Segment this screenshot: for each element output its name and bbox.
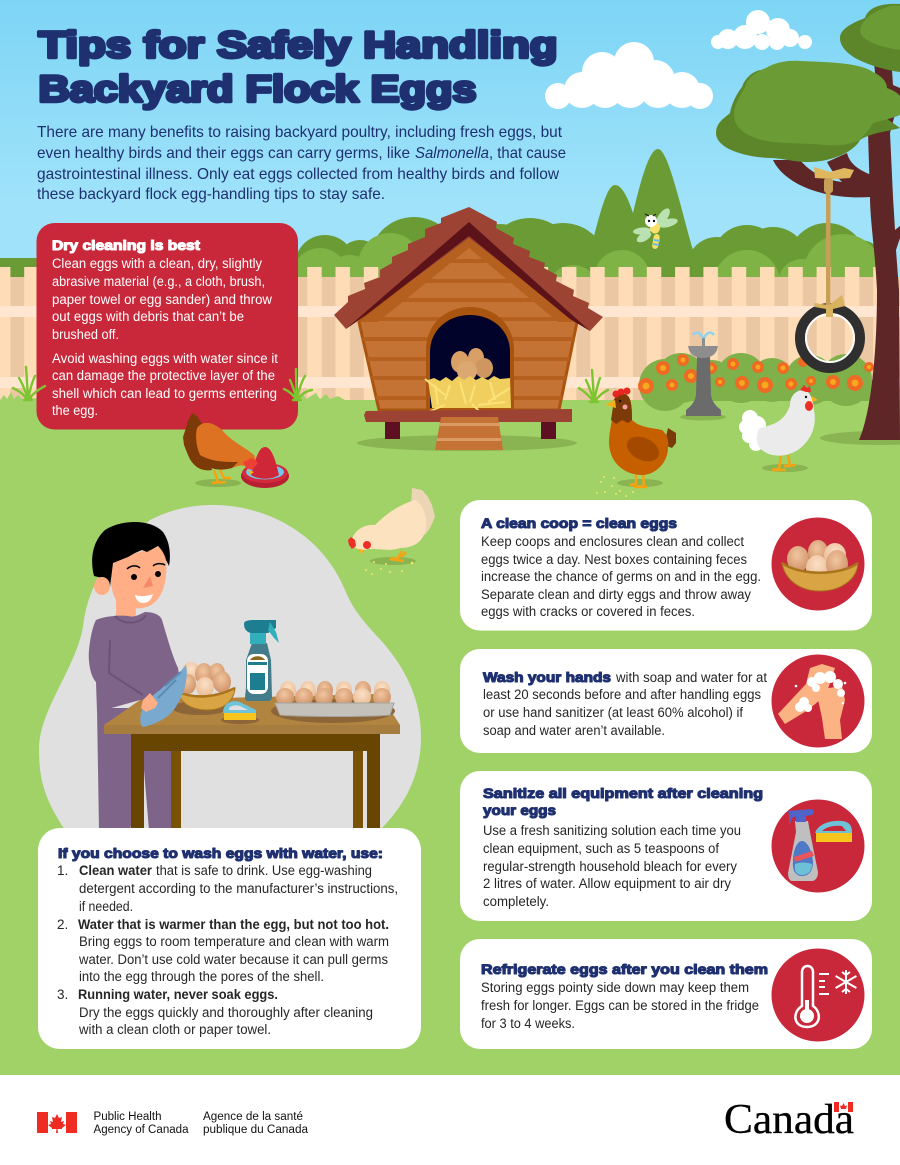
list heading: If you choose to wash eggs with water, use: [58,845,383,861]
list item 1 [57,863,398,914]
trousers [97,708,172,830]
body text: eggs twice a day. Nest boxes containing feces [481,552,747,567]
footer band [0,1075,900,1165]
flowering bushes [638,353,878,411]
list item 3: Dry the eggs quickly and thoroughly after cleaning [79,1005,373,1020]
tire swing [800,167,860,368]
list item 1: detergent according to the manufacturer’s instructions, [79,881,398,896]
grass tuft right of panel [284,369,312,400]
list item 1: Clean water [79,863,153,878]
panel heading: Dry cleaning is best [52,237,200,253]
intro text: gastrointestinal illness. Only eat eggs collected from healthy birds and follow [37,166,559,183]
title: Tips for Safely Handling [38,24,558,66]
clouds [545,10,812,109]
panel text: paper towel or egg sander) and throw [52,292,272,307]
panel: sanitize equipment [460,771,872,921]
grass tuft left [13,367,45,400]
grain scatter [596,476,634,497]
coop ramp [435,417,503,450]
agency name English: Public Health [94,1111,162,1123]
hair [92,522,170,587]
body text: 2 litres of water. Allow equipment to air dry [483,876,731,891]
bird bath [680,333,726,420]
coop floor [364,409,572,422]
body text: fresh for longer. Eggs can be stored in the fridge [481,998,759,1013]
hen: pecking brown with feeder [183,413,289,488]
intro text [37,124,566,203]
intro text: Salmonella [415,145,489,162]
list item 1: if needed. [79,899,133,914]
heading [483,785,763,818]
body text: soap and water aren’t available. [483,723,665,738]
eyes, eyebrows, nose, smile [127,564,165,603]
Government of Canada flag symbol [37,1112,77,1133]
panel text: abrasive material (e.g., a cloth, brush, [52,274,265,289]
body text: with soap and water for at [615,670,767,685]
title [38,24,558,110]
coop body [350,235,590,410]
list item 2 [57,917,389,984]
body text [483,670,767,738]
intro text: , that cause [489,145,566,162]
boy [89,522,180,830]
coop door [426,307,514,410]
heading: Sanitize all equipment after cleaning [483,785,763,801]
body text [481,980,759,1031]
panel text: shell which can lead to germs entering [52,386,277,401]
brush on table [223,701,256,720]
body text: Separate clean and dirty eggs and throw away [481,587,751,602]
intro text: even healthy birds and their eggs can carry germs, like [37,145,410,162]
egg carton [275,681,394,716]
heading: your eggs [483,802,556,818]
blob behind boy [39,505,421,830]
agency name French [203,1111,309,1136]
list item 1: 1. [57,863,68,878]
panel: refrigerate eggs [460,939,872,1049]
body text: regular-strength household bleach for every [483,859,737,874]
panel text: can damage the protective layer of the [52,368,275,383]
feeder [241,447,289,488]
spray bottle [244,620,279,701]
intro text: There are many benefits to raising backyard poultry, including fresh eggs, but [37,124,563,141]
picket fence [0,267,900,402]
ear [94,577,110,595]
list item 3: Running water, never soak eggs. [78,987,278,1002]
body text [483,823,741,909]
icon: spray bottle and brush [772,800,864,892]
tree [716,4,900,445]
agency name English [94,1111,189,1136]
list item 2: water. Don’t use cold water because it can pull germs [78,952,388,967]
list item 2: Water that is warmer than the egg, but not too hot. [78,917,389,932]
agency name French: Agence de la santé [203,1111,303,1123]
agency name French: publique du Canada [203,1124,309,1136]
basket of eggs on table [178,662,235,710]
agency name English: Agency of Canada [94,1124,189,1136]
body text: or use hand sanitizer (at least 60% alcohol) if [483,705,743,720]
body text: clean equipment, such as 5 teaspoons of [483,841,719,856]
body text: Use a fresh sanitizing solution each time you [483,823,741,838]
heading: Refrigerate eggs after you clean them [481,961,768,977]
icon: basket of eggs [772,518,864,610]
panel text: the egg. [52,403,98,418]
towel and hand [140,665,187,727]
sweater [89,612,180,712]
list item 2: 2. [57,917,68,932]
hen: cream pecking [348,488,435,575]
chicken coop [334,207,603,451]
panel text: brushed off. [52,327,119,342]
panel text: Avoid washing eggs with water since it [52,351,278,366]
body text: for 3 to 4 weeks. [481,1016,575,1031]
title: Backyard Flock Eggs [38,68,476,110]
body text [481,534,761,619]
list item 3: with a clean cloth or paper towel. [78,1022,271,1037]
intro text: these backyard flock egg-handling tips to stay safe. [37,186,385,203]
body text: least 20 seconds before and after handling eggs [483,687,761,702]
heading: Wash your hands [483,669,611,685]
list item 2: into the egg through the pores of the shell. [79,969,324,984]
hills and bushes behind fence [0,149,885,334]
list item 3 [57,987,373,1037]
body text: eggs with cracks or covered in feces. [481,604,695,619]
panel: dry cleaning [36,223,298,430]
coop legs [385,420,556,439]
panel text: Clean eggs with a clean, dry, slightly [52,256,262,271]
table [104,694,400,830]
body text: completely. [483,894,549,909]
grass tuft centre [579,370,608,402]
coop roof [334,207,603,331]
straw nest [425,376,511,412]
hen: white [739,385,818,472]
heading: A clean coop = clean eggs [481,515,677,531]
sky background [0,0,900,400]
panel: a clean coop [460,500,872,630]
face [111,545,166,608]
dragonfly [633,206,679,249]
panel: wash with water list [38,828,421,1049]
list item 3: 3. [57,987,68,1002]
panel: wash your hands [460,649,872,753]
coop shadow [357,435,577,451]
lawn [0,392,900,1075]
icon: washing hands [772,654,864,748]
body text: increase the chance of germs on and in the egg. [481,569,761,584]
neck [116,595,136,619]
Canada wordmark: Canada [724,1097,854,1143]
list item 1: that is safe to drink. Use egg-washing [156,863,372,878]
body text: Keep coops and enclosures clean and collect [481,534,744,549]
panel text [52,256,278,418]
panel text: out eggs with debris that can’t be [52,309,244,324]
hen: standing brown [605,388,676,487]
eggs in nest [451,348,493,381]
list item 2: Bring eggs to room temperature and clean with warm [79,934,389,949]
icon: thermometer and snowflake [772,948,864,1042]
body text: Storing eggs pointy side down may keep them [481,980,749,995]
